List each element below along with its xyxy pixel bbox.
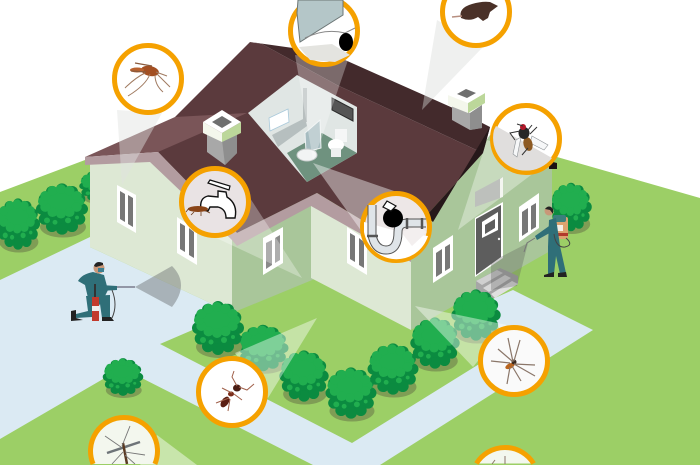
beam: ant — [235, 318, 317, 398]
pipe collars — [367, 218, 422, 236]
sink — [297, 149, 317, 161]
roof: left fascia — [85, 152, 411, 262]
window 6 — [519, 193, 539, 242]
circle: lower mosquito — [90, 418, 158, 464]
icon: black pest — [339, 33, 353, 51]
bush front 2 — [192, 301, 244, 358]
bathroom walls — [248, 75, 357, 182]
towel — [269, 109, 289, 131]
icon: pipe — [372, 205, 426, 250]
bush small on lawn — [103, 358, 143, 398]
front steps — [476, 268, 518, 300]
wall: front gable light — [311, 195, 411, 330]
icon: bottom pest — [492, 456, 505, 464]
wall: front gable shaded — [232, 190, 317, 313]
icon: spider — [491, 338, 535, 384]
bush behind house left — [79, 170, 121, 204]
beam: lower mosquito — [140, 435, 197, 465]
chimney right — [448, 85, 485, 130]
window 4 — [347, 227, 367, 275]
toilet — [328, 129, 347, 157]
driveway and path — [0, 237, 593, 465]
bush far left — [0, 198, 40, 252]
circle: mosquito — [114, 46, 182, 112]
beam: mosquito to window — [117, 110, 162, 185]
roof: left light band — [85, 113, 247, 157]
bush front 5 — [368, 343, 418, 398]
beam: spider — [415, 306, 507, 367]
bush front 7 — [326, 367, 376, 422]
icon: fly — [510, 124, 548, 157]
icon: cockroach — [186, 206, 210, 216]
roof: back dark plane — [250, 42, 490, 153]
beam: fly to wall — [458, 140, 547, 230]
right spray cone — [491, 243, 528, 290]
beam: bathroom — [295, 55, 348, 160]
bush front 4 — [410, 317, 460, 372]
beam: pipe to sink — [313, 163, 397, 232]
circle: bottom pest — [476, 447, 534, 464]
bush front 6 — [279, 350, 329, 404]
circle: ant — [198, 358, 266, 426]
circle: bathroom detail — [290, 0, 358, 64]
sink floor detail — [299, 44, 350, 62]
beam: tap to floor — [212, 195, 302, 278]
circle: drain pipe — [362, 194, 430, 260]
bush front 1 — [238, 325, 288, 374]
icon: mosquito — [125, 63, 170, 96]
roof: black eave tip — [549, 161, 557, 169]
circle: spider — [480, 328, 548, 394]
worker kneeling with sprayer — [71, 262, 135, 321]
bathroom floor — [287, 133, 357, 182]
window 3 — [263, 227, 283, 275]
bush right of house — [550, 183, 592, 234]
circle: rat — [442, 0, 510, 46]
lawn — [0, 157, 700, 465]
bush front 3 — [451, 289, 501, 344]
wall vent — [475, 177, 503, 207]
bathtub — [272, 118, 307, 147]
wall: left wing — [90, 160, 232, 313]
window 2 — [177, 217, 197, 265]
wall: right side — [411, 135, 552, 330]
chimney left — [203, 110, 241, 165]
icon: tap — [201, 191, 236, 218]
circle: fly — [492, 106, 560, 172]
bathroom cutaway — [248, 75, 357, 182]
wall picture — [332, 98, 353, 121]
gable detail — [493, 126, 552, 171]
wall box detail — [401, 226, 427, 246]
roof: main plane — [158, 42, 483, 250]
beam: rat to roof — [422, 20, 483, 110]
pest feelers — [383, 201, 396, 211]
left spray cone — [135, 266, 181, 307]
bush left — [36, 183, 88, 238]
circle lower white area — [364, 222, 428, 259]
circle: tap and cockroach — [182, 168, 248, 236]
window 1 — [117, 185, 136, 233]
window 5 — [433, 235, 453, 283]
icon: tap handle — [208, 180, 230, 190]
icon: black pest — [383, 208, 403, 228]
mirror detail — [297, 0, 343, 42]
house — [85, 42, 557, 330]
icon: rat — [452, 2, 498, 21]
door — [475, 202, 503, 277]
icon: crane fly — [105, 426, 145, 464]
roof: right dark edge — [426, 127, 490, 222]
icon: ant — [216, 371, 254, 411]
worker standing with backpack sprayer — [524, 206, 570, 277]
mirror — [305, 120, 321, 152]
shower — [303, 88, 307, 122]
wire — [305, 28, 355, 38]
